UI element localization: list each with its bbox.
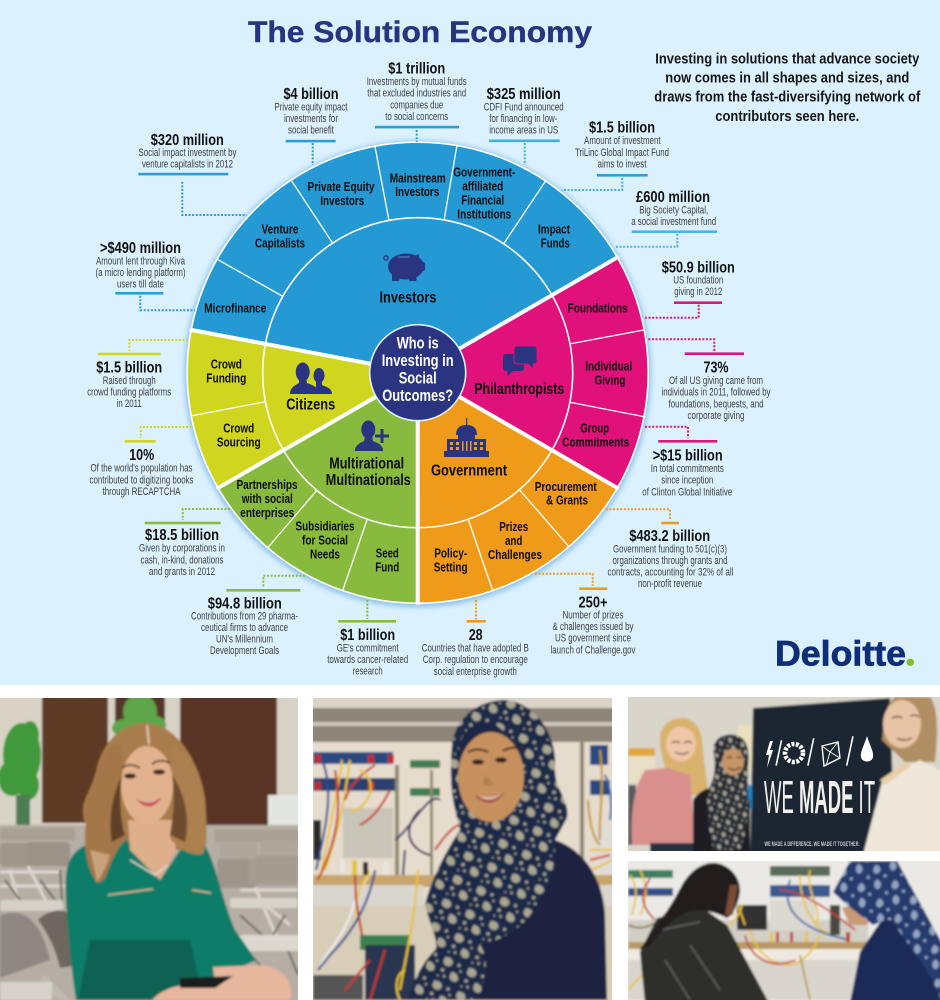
callout: $1 billion: GE's commitment (337, 642, 399, 654)
center circle: question: Social (399, 370, 437, 388)
callout: $483.2 billion (606, 509, 734, 590)
callout: >$490 million: (a micro lending platform) (96, 267, 186, 279)
center circle: question: Who is (397, 334, 439, 352)
callout: $50.9 billion: US foundation (673, 274, 723, 286)
sector label: Multinationals: Multinationals (326, 472, 411, 489)
intro paragraph: now comes in all shapes and sizes, and (665, 71, 909, 87)
sector label: Government: Government (431, 462, 508, 479)
philanthropists labels: Commitments (562, 435, 629, 450)
callout: $1 billion: $1 billion (340, 627, 395, 644)
philanthropists labels: Individual (585, 359, 632, 374)
callout: $94.8 billion: ceutical firms to advance (201, 622, 288, 634)
callout: $1 trillion: $1 trillion (388, 60, 445, 77)
sector label: Investors: Investors (380, 290, 437, 307)
callout: 28: social enterprise growth (434, 666, 517, 678)
callout: $1 trillion: to social concerns (385, 111, 448, 123)
callout: $1.5 billion crowd funding: Raised through (103, 375, 156, 387)
investor sub-labels: Impact (538, 221, 571, 236)
callout: $94.8 billion (191, 576, 305, 657)
callout: $1.5 billion TriLinc: Amount of investment (584, 135, 661, 147)
title: The Solution Economy (248, 16, 593, 49)
investor sub-labels: Microfinance (204, 300, 266, 315)
callout: $325 million: income areas in US (489, 125, 558, 137)
callout: $1.5 billion TriLinc (562, 120, 669, 190)
multinationals labels: Seed (376, 546, 399, 561)
callout: >$15 billion: >$15 billion (653, 448, 723, 465)
philanthropists labels: Foundations (568, 300, 628, 315)
investor sub-labels: Mainstream (390, 170, 446, 185)
callout: $18.5 billion: cash, in-kind, donations (140, 554, 224, 566)
multinationals labels: with social (241, 491, 293, 506)
callout: $94.8 billion: UN's Millennium (216, 634, 273, 646)
government labels (434, 479, 597, 575)
callout: $325 million: for financing in low- (489, 113, 558, 125)
investor sub-labels: Investors (395, 184, 439, 199)
icon: piggy bank (384, 254, 425, 281)
callout: $1 billion: towards cancer-related (327, 654, 408, 666)
callout: $320 million (138, 132, 247, 215)
panel: infographic background (0, 0, 940, 685)
callout: $50.9 billion: giving in 2012 (674, 286, 722, 298)
intro paragraph: contributors seen here. (715, 109, 859, 125)
photo: three women in front of We Made It board (625, 695, 940, 855)
board text: We Made It: WE MADE IT (764, 771, 875, 823)
callout: >$490 million: >$490 million (100, 240, 181, 257)
callout: 28: Corp. regulation to encourage (423, 654, 528, 666)
callout: 73%: Of all US giving came from (669, 375, 763, 387)
government labels: Policy- (434, 546, 467, 561)
government labels: & Grants (546, 493, 588, 508)
callout: >$490 million (96, 240, 195, 310)
callout: $1.5 billion TriLinc: aims to invest (598, 159, 647, 171)
callout: $320 million: Social impact investment by (138, 147, 237, 159)
callout: 73%: foundations, bequests, and (668, 398, 764, 410)
callout: $483.2 billion: contracts, accounting for 32% of all (608, 567, 734, 579)
icon: people (290, 362, 332, 394)
citizens labels: Crowd (211, 356, 242, 371)
callout: $1 billion: research (353, 665, 383, 677)
wheel diagram (185, 141, 651, 607)
callout: $18.5 billion: $18.5 billion (145, 527, 219, 544)
citizens labels (206, 356, 261, 450)
callout: £600 million: Big Society Capital, (639, 204, 708, 216)
callout: 73%: individuals in 2011, followed by (662, 387, 771, 399)
multinationals labels: for Social (302, 533, 348, 548)
callout: 250+: launch of Challenge.gov (550, 644, 636, 656)
investor sub-labels (204, 165, 571, 315)
callout: $94.8 billion: Contributions from 29 pharma- (191, 610, 298, 622)
callout: 10% (90, 427, 194, 498)
callout: $18.5 billion: Given by corporations in (139, 543, 225, 555)
callout: >$15 billion: since inception (661, 475, 713, 487)
sector label: Multinationals: Multirational (329, 455, 404, 472)
callout: 10%: through RECAPTCHA (102, 486, 181, 498)
investor sub-labels: Financial (461, 193, 504, 208)
callout: $50.9 billion: $50.9 billion (662, 259, 735, 276)
callout: >$490 million: Amount lent through Kiva (96, 255, 185, 267)
callout: $1.5 billion crowd funding: $1.5 billion (96, 359, 162, 376)
investor sub-labels: Venture (262, 221, 298, 236)
investor sub-labels: Private Equity (308, 179, 375, 194)
investor sub-labels: Funds (541, 235, 570, 250)
callout: $18.5 billion (139, 509, 230, 578)
board icons: bolt, gear, cube, drop (766, 736, 873, 768)
callout: $1 trillion: that excluded industries and (367, 88, 466, 100)
callout: $483.2 billion: non-profit revenue (638, 578, 702, 590)
board small print: WE MADE A DIFFERENCE. WE MADE IT TOGETHER. (764, 842, 860, 848)
investor sub-labels: Capitalists (255, 235, 305, 250)
callout: $1 trillion (367, 60, 467, 142)
callout: $320 million: $320 million (151, 132, 224, 149)
government labels: Prizes (499, 519, 528, 534)
callout: $1.5 billion crowd funding (87, 340, 188, 410)
callout: $1 trillion: companies due (390, 99, 443, 111)
callout: 73%: corporate giving (688, 410, 745, 422)
callout: 28: 28 (469, 627, 483, 644)
callout: $4 billion: Private equity impact (274, 101, 348, 113)
citizens labels: Funding (206, 370, 246, 385)
callout: 28 (422, 600, 529, 678)
multinationals labels (236, 477, 399, 575)
government labels: and (505, 533, 522, 548)
center circle: question: Outcomes? (382, 387, 453, 405)
callout: >$15 billion: of Clinton Global Initiative (642, 486, 732, 498)
multinationals labels: Needs (310, 547, 340, 562)
investor sub-labels: Institutions (457, 207, 511, 222)
center circle: question (370, 325, 466, 421)
philanthropists labels (562, 300, 632, 450)
callout: 73% (648, 339, 771, 422)
investor sub-labels: Investors (320, 193, 364, 208)
callout: $325 million: $325 million (487, 86, 561, 103)
photo: two women working on wiring bench (625, 858, 940, 1000)
photo: woman in patterned headscarf in lab (310, 695, 618, 1000)
callout: 250+: & challenges issued by (552, 621, 634, 633)
citizens labels: Sourcing (217, 435, 261, 450)
callout: >$15 billion (642, 427, 732, 498)
callout: $320 million: venture capitalists in 2012 (142, 159, 233, 171)
callout: $94.8 billion: $94.8 billion (208, 595, 282, 612)
callout: 250+: Number of prizes (562, 609, 624, 621)
callout: 10%: contributed to digitizing books (90, 474, 194, 486)
sector label: Citizens: Citizens (286, 396, 335, 413)
icon: capitol building (444, 418, 489, 457)
callout: $483.2 billion: $483.2 billion (629, 528, 710, 545)
philanthropists labels: Group (580, 421, 609, 436)
wheel shadow (185, 141, 651, 607)
callout: £600 million (616, 189, 717, 247)
government labels: Setting (434, 560, 468, 575)
callout: >$15 billion: In total commitments (651, 463, 724, 475)
multinationals labels: Fund (375, 560, 399, 575)
callout: 250+ (535, 574, 636, 656)
callout: $50.9 billion (645, 259, 735, 318)
callout: $1.5 billion TriLinc: TriLinc Global Impact Fund (575, 147, 669, 159)
callout: $325 million: CDFI Fund announced (484, 101, 564, 113)
philanthropists labels: Giving (594, 372, 626, 387)
sector label: Philanthropists: Philanthropists (474, 381, 564, 398)
callout: 10%: Of the world's population has (90, 463, 192, 475)
callout: $325 million (484, 86, 564, 165)
callout: $4 billion (274, 86, 348, 165)
callout: >$490 million: users till date (117, 278, 164, 290)
callout: $1 billion (327, 600, 408, 677)
callout: 73%: 73% (704, 360, 729, 377)
sector label: Multinationals (326, 455, 411, 489)
callout: $1.5 billion crowd funding: crowd funding platforms (87, 387, 171, 399)
photo: woman in teal shirt among chairs (0, 694, 305, 1000)
callout: 250+: US government since (555, 633, 631, 645)
callout: $18.5 billion: and grants in 2012 (149, 566, 215, 578)
callout: £600 million: £600 million (636, 189, 710, 206)
intro paragraph (654, 51, 920, 125)
icon: speech bubbles (503, 346, 537, 376)
investor sub-labels: affiliated (462, 179, 503, 194)
logo: Deloitte: Deloitte (775, 635, 906, 674)
callout: $4 billion: $4 billion (284, 86, 338, 103)
callout: $1.5 billion crowd funding: in 2011 (117, 398, 142, 410)
callout: $483.2 billion: Government funding to 501(c)(3) (613, 543, 727, 555)
government labels: Procurement (535, 479, 597, 494)
callout: 10%: 10% (129, 447, 154, 464)
multinationals labels: Subsidiaries (296, 519, 354, 534)
citizens labels: Crowd (223, 421, 254, 436)
icon: person with plus (355, 420, 389, 451)
callout: $4 billion: investments for (284, 113, 338, 125)
wheel sectors (187, 142, 648, 605)
center circle: question: Investing in (382, 352, 454, 370)
callout: $1.5 billion TriLinc: $1.5 billion (589, 120, 655, 137)
investor sub-labels: Government- (453, 165, 515, 180)
callout: 28: Countries that have adopted B (422, 642, 529, 654)
callout: $94.8 billion: Development Goals (210, 645, 279, 657)
multinationals labels: enterprises (240, 505, 294, 520)
multinationals labels: Partnerships (236, 477, 298, 492)
callout: $4 billion: social benefit (288, 124, 334, 136)
callout: £600 million: a social investment fund (631, 216, 716, 228)
callout: $483.2 billion: organizations through grants and (612, 555, 728, 567)
government labels: Challenges (488, 547, 542, 562)
callout: $1 trillion: Investments by mutual funds (367, 76, 467, 88)
callout: 250+: 250+ (578, 594, 608, 611)
